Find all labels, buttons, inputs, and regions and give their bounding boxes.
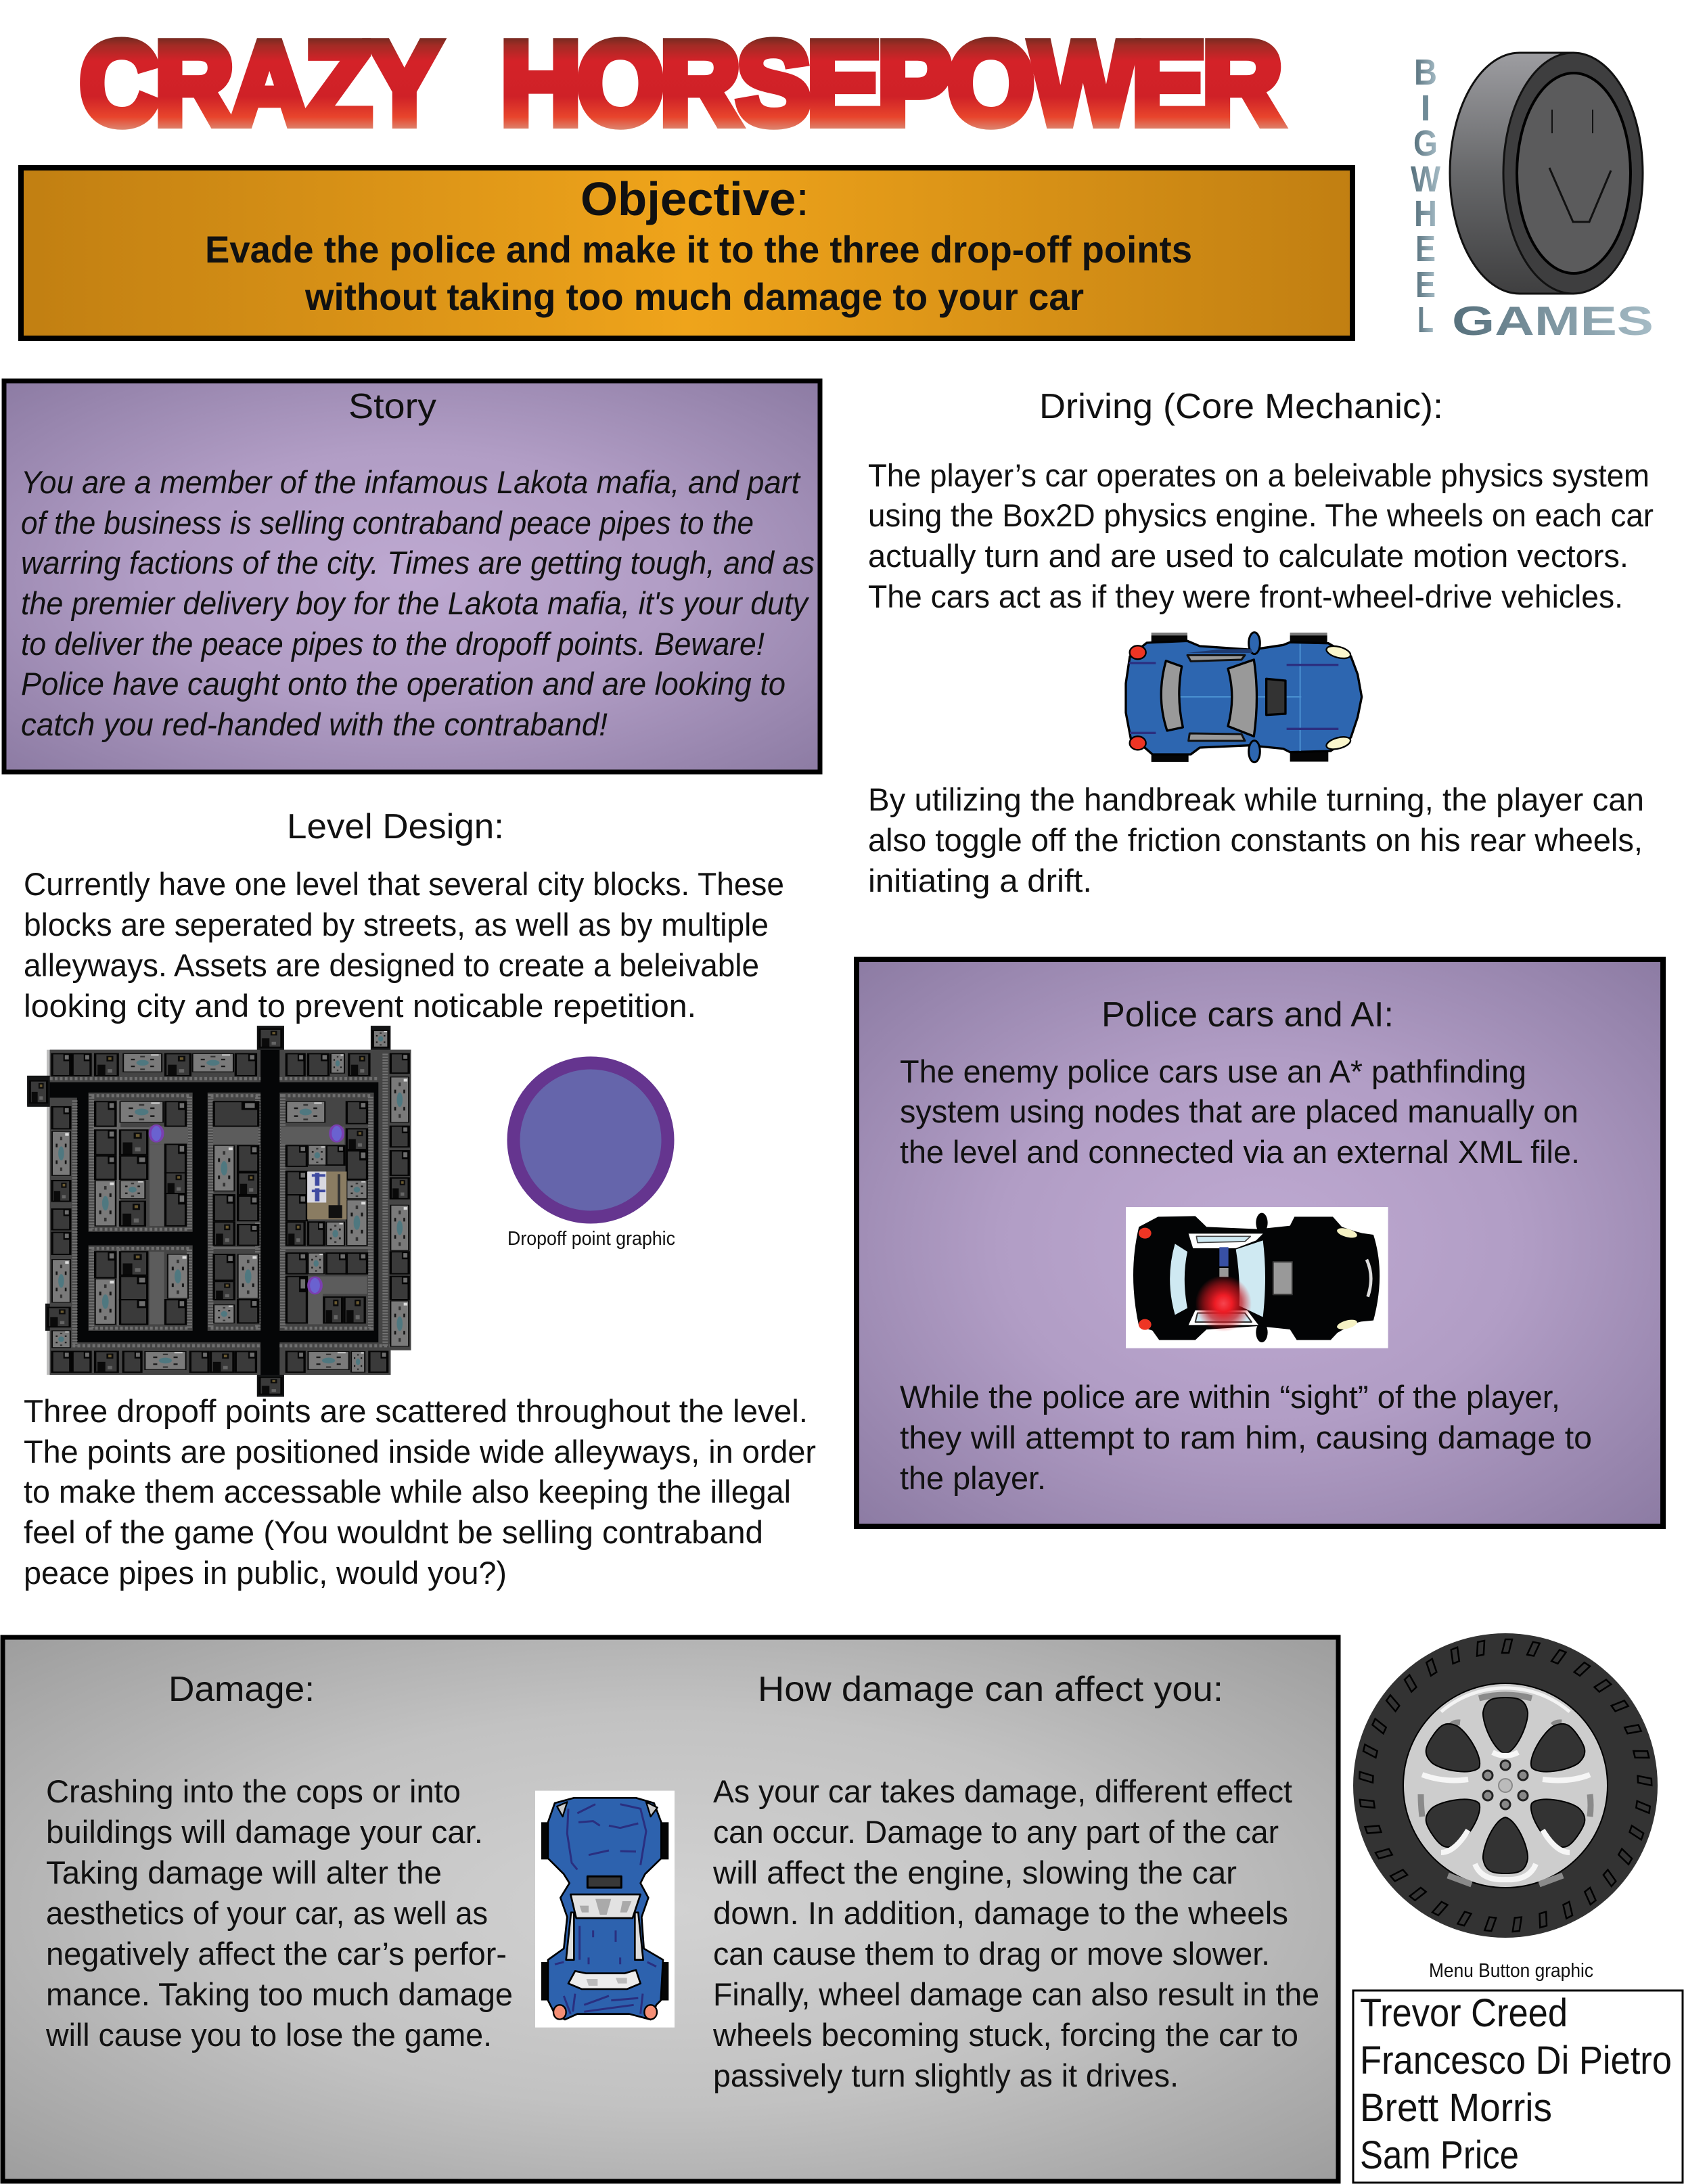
- panel: team names: [1353, 1990, 1683, 2183]
- logo letters: Big Wheel: E: [1415, 229, 1436, 269]
- map: city level: [27, 1026, 411, 1396]
- text: damage right column: will affect the engine, slowing the car: [712, 1855, 1237, 1890]
- panel: objective: Evade the police and make it to the three drop-off points: [205, 228, 1192, 271]
- text: level intro: alleyways. Assets are designed to create a beleivable: [24, 947, 759, 983]
- text: story body: catch you red-handed with the contraband!: [21, 706, 608, 742]
- logo letters: Big Wheel: W: [1411, 159, 1440, 200]
- text: damage left column: will cause you to lose the game.: [45, 2017, 492, 2053]
- panel: team names: Brett Morris: [1360, 2086, 1552, 2130]
- text: police pathfinding: [900, 1053, 1580, 1170]
- map: market: [307, 1172, 346, 1219]
- text: police pathfinding: The enemy police cars use an A* pathfinding: [900, 1053, 1526, 1089]
- logo letters: Big Wheel: [1411, 52, 1440, 340]
- text: level intro: looking city and to prevent noticable repetition.: [24, 988, 696, 1024]
- text: damage right column: can occur. Damage to any part of the car: [713, 1814, 1279, 1850]
- logo letters: Big Wheel: B: [1414, 52, 1437, 93]
- text: police ramming: While the police are within “sight” of the player,: [900, 1379, 1560, 1415]
- text: damage left column: mance. Taking too much damage: [46, 1976, 513, 2012]
- panel: objective: [21, 168, 1352, 338]
- text: damage left column: negatively affect the car’s perfor-: [46, 1936, 507, 1972]
- text: dropoff description: feel of the game (You wouldnt be selling contraband: [24, 1514, 763, 1550]
- text: driving intro: The cars act as if they were front-wheel-drive vehicles.: [868, 578, 1623, 614]
- text: drifting: initiating a drift.: [868, 863, 1092, 898]
- heading: police: Police cars and AI:: [1101, 995, 1394, 1034]
- text: level intro: [24, 866, 784, 1024]
- panel: damage: [3, 1637, 1338, 2181]
- panel: story: [4, 381, 820, 772]
- text: damage left column: Crashing into the cops or into: [46, 1773, 461, 1809]
- text: dropoff description: Three dropoff points are scattered throughout the level.: [24, 1393, 808, 1429]
- text: police ramming: [900, 1379, 1592, 1496]
- text: driving intro: The player’s car operates on a beleivable physics system: [868, 457, 1649, 493]
- text: damage left column: Taking damage will alter the: [46, 1855, 442, 1890]
- heading: story: Story: [348, 387, 436, 426]
- text: damage right column: can cause them to drag or move slower.: [713, 1936, 1270, 1972]
- text: driving intro: actually turn and are used to calculate motion vectors.: [868, 538, 1629, 574]
- panel: objective: Objective:: [581, 173, 809, 225]
- text: story body: [21, 464, 815, 742]
- heading: damage: Damage:: [168, 1670, 315, 1709]
- text: damage right column: [712, 1773, 1319, 2093]
- text: driving intro: [868, 457, 1654, 614]
- icon: blue player car: [1126, 633, 1362, 763]
- text: story body: Police have caught onto the operation and are looking to: [21, 666, 786, 702]
- text: police pathfinding: system using nodes that are placed manually on: [900, 1093, 1578, 1129]
- text: story body: You are a member of the infamous Lakota mafia, and part: [21, 464, 801, 500]
- text: story body: to deliver the peace pipes to the dropoff points. Beware!: [21, 626, 765, 662]
- text: story body: warring factions of the city. Times are getting tough, and as: [21, 545, 815, 581]
- icon: police car: [1126, 1207, 1388, 1348]
- text: damage right column: down. In addition, damage to the wheels: [713, 1895, 1288, 1931]
- text: drifting: By utilizing the handbreak while turning, the player can: [868, 781, 1644, 817]
- caption: menu button: Menu Button graphic: [1429, 1960, 1593, 1982]
- caption: dropoff: Dropoff point graphic: [507, 1228, 675, 1250]
- text: damage right column: Finally, wheel damage can also result in the: [713, 1976, 1319, 2012]
- logo: Big Wheel Games: [1411, 52, 1654, 344]
- text: damage left column: aesthetics of your car, as well as: [46, 1895, 488, 1931]
- panel: team names: Sam Price: [1360, 2133, 1519, 2177]
- text: police pathfinding: the level and connected via an external XML file.: [900, 1134, 1580, 1170]
- text: dropoff description: peace pipes in public, would you?): [24, 1555, 507, 1591]
- section: level design: [24, 807, 816, 1591]
- text: dropoff description: The points are positioned inside wide alleyways, in order: [24, 1434, 816, 1470]
- text: driving intro: using the Box2D physics engine. The wheels on each car: [868, 497, 1654, 533]
- heading: how damage can affect you: How damage can affect you:: [758, 1670, 1223, 1709]
- text: police ramming: the player.: [900, 1460, 1046, 1496]
- text: damage right column: passively turn slightly as it drives.: [713, 2057, 1179, 2093]
- title: Crazy Horsepower: HORSEPOWER: [501, 17, 1281, 149]
- text: drifting: also toggle off the friction constants on his rear wheels,: [868, 822, 1643, 858]
- text: dropoff description: [24, 1393, 816, 1591]
- panel: objective: without taking too much damage to your car: [304, 275, 1084, 318]
- icon: damaged blue car: [535, 1791, 675, 2028]
- text: level intro: blocks are seperated by streets, as well as by multiple: [24, 907, 769, 942]
- text: damage right column: wheels becoming stuck, forcing the car to: [712, 2017, 1298, 2053]
- text: police ramming: they will attempt to ram him, causing damage to: [900, 1419, 1592, 1455]
- panel: police cars and AI: [857, 959, 1663, 1526]
- map: dropoff markers: [150, 1125, 343, 1294]
- logo letters: Big Wheel: E: [1415, 265, 1436, 305]
- heading: driving: Driving (Core Mechanic):: [1039, 387, 1443, 426]
- text: story body: the premier delivery boy for the Lakota mafia, it's your duty: [21, 585, 809, 621]
- text: damage left column: [45, 1773, 513, 2053]
- text: story body: of the business is selling contraband peace pipes to the: [21, 505, 754, 541]
- title: Crazy Horsepower: [80, 17, 1281, 149]
- logo letters: Big Wheel: L: [1417, 300, 1434, 340]
- heading: level design: Level Design:: [287, 807, 504, 846]
- section: driving core mechanic: [868, 387, 1654, 898]
- title: Crazy Horsepower: CRAZY: [80, 17, 440, 149]
- icon: smiling tire: [1450, 53, 1643, 294]
- text: level intro: Currently have one level that several city blocks. These: [24, 866, 784, 902]
- icon: menu button wheel: [1353, 1633, 1658, 1938]
- text: damage right column: As your car takes damage, different effect: [713, 1773, 1292, 1809]
- icon: dropoff point graphic: [507, 1063, 675, 1250]
- logo word: Games: GAMES: [1452, 298, 1654, 344]
- text: dropoff description: to make them accessable while also keeping the illegal: [24, 1474, 791, 1509]
- panel: team names: Trevor Creed: [1360, 1991, 1568, 2035]
- text: damage left column: buildings will damage your car.: [46, 1814, 483, 1850]
- logo letters: Big Wheel: H: [1414, 194, 1437, 234]
- text: drifting: [868, 781, 1644, 898]
- logo letters: Big Wheel: G: [1413, 123, 1438, 164]
- logo letters: Big Wheel: I: [1420, 88, 1431, 129]
